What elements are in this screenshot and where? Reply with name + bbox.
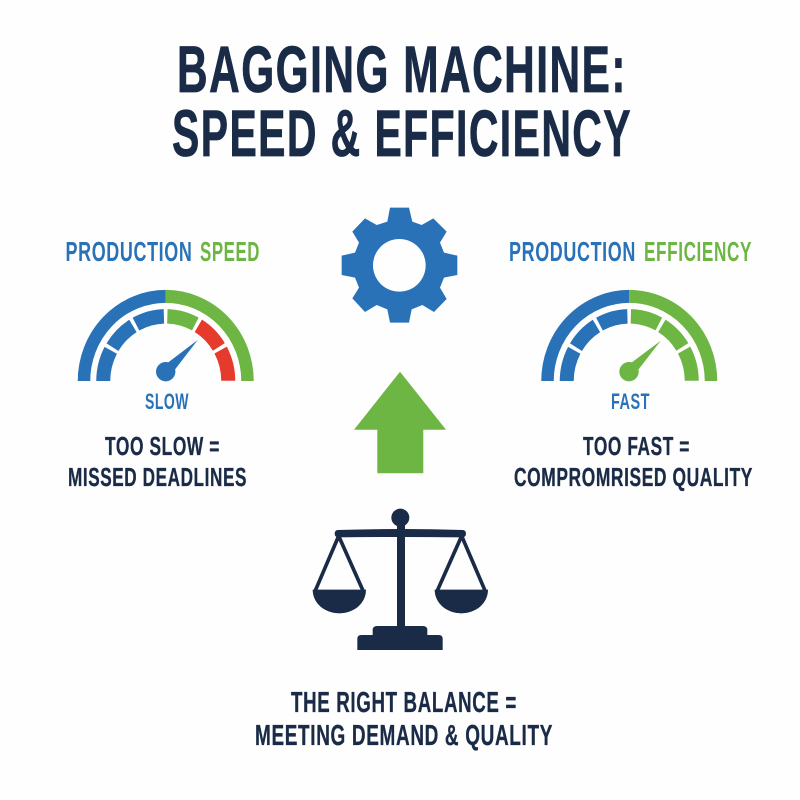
panel: production speed bbox=[66, 236, 260, 492]
gauge label: slow: SLOW bbox=[145, 389, 189, 414]
panel: production efficiency bbox=[509, 236, 753, 492]
icon: gear bbox=[342, 208, 457, 323]
caption: too slow: MISSED DEADLINES bbox=[68, 462, 247, 492]
gauge needle: efficiency bbox=[619, 341, 661, 381]
gauge label: fast: FAST bbox=[611, 389, 650, 414]
gauge: speed bbox=[84, 296, 248, 381]
caption: the right balance: THE RIGHT BALANCE = bbox=[291, 687, 517, 719]
caption: the right balance: MEETING DEMAND & QUALITY bbox=[255, 720, 553, 752]
caption: the right balance bbox=[255, 687, 553, 752]
caption: too slow: TOO SLOW = bbox=[105, 431, 220, 461]
caption: too fast bbox=[514, 431, 753, 492]
title bbox=[172, 32, 632, 170]
heading: production efficiency: PRODUCTION bbox=[509, 236, 636, 267]
caption: too slow bbox=[68, 431, 247, 492]
heading: production speed: PRODUCTION bbox=[66, 236, 192, 267]
gauge: efficiency bbox=[548, 296, 711, 381]
heading: production speed: SPEED bbox=[200, 236, 260, 267]
caption: too fast: TOO FAST = bbox=[583, 431, 690, 461]
arrow: up bbox=[354, 372, 446, 473]
gauge needle: speed bbox=[156, 340, 198, 381]
icon: balance scale bbox=[313, 509, 488, 650]
